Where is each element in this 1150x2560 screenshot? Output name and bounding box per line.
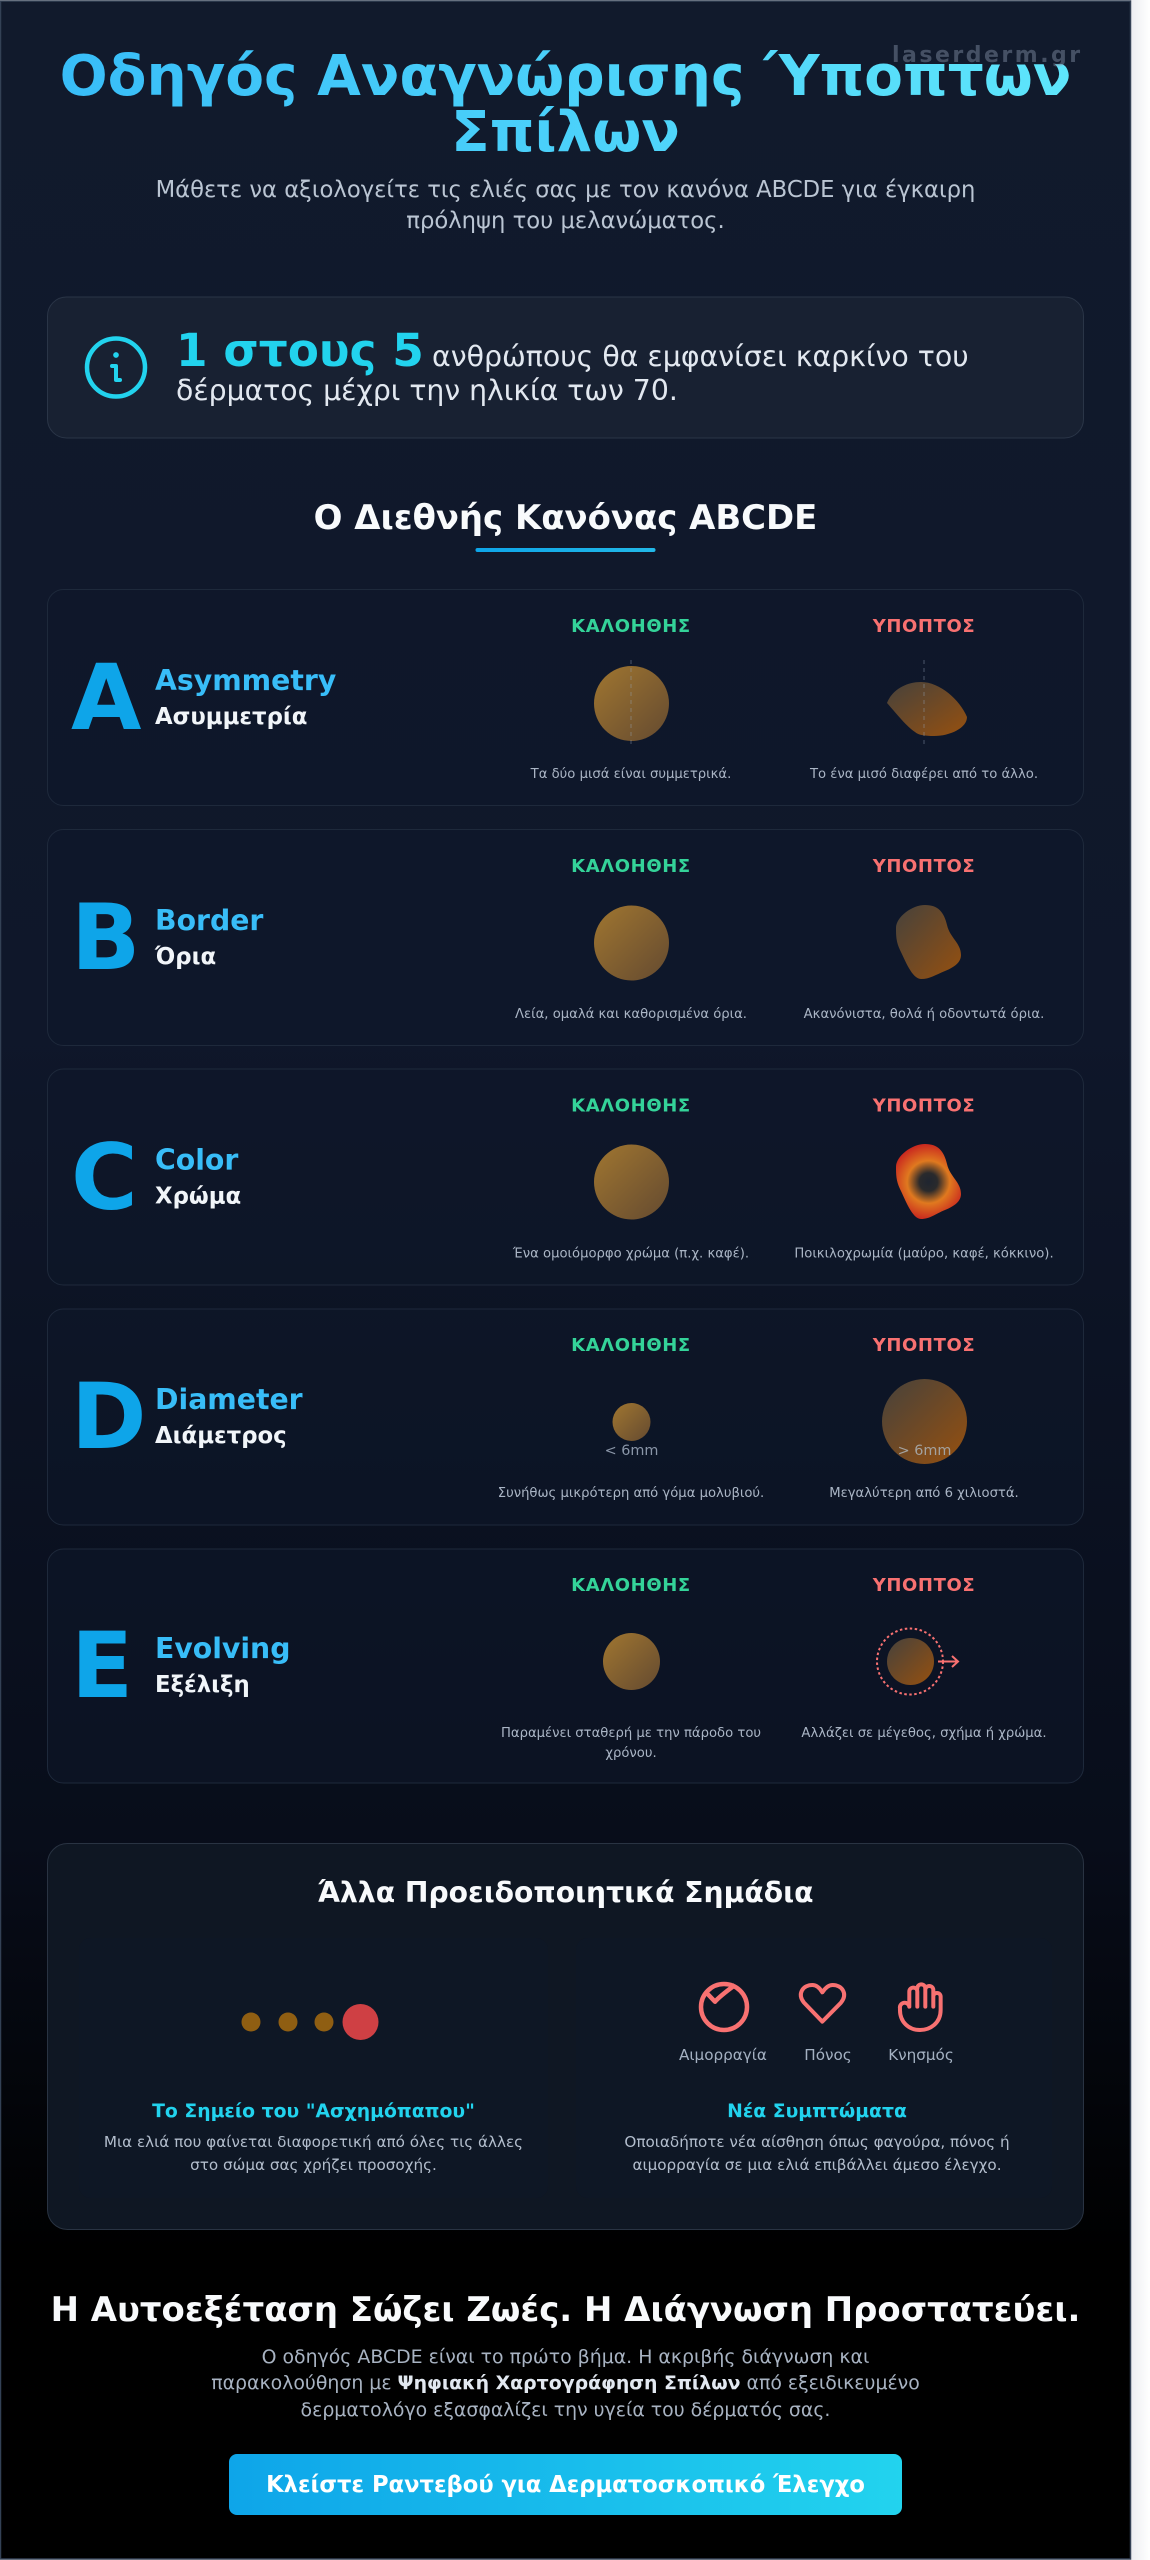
name B: Border bbox=[155, 904, 263, 937]
letter C: C bbox=[71, 1126, 138, 1230]
statistic text: δέρματος μέχρι την ηλικία των 70. bbox=[176, 374, 678, 407]
letter B: B bbox=[71, 886, 140, 991]
symptom labels bbox=[679, 2046, 954, 2064]
title: Οδηγός Αναγνώρισης Ύποπτων bbox=[60, 44, 1071, 109]
panel: other warning signs bbox=[48, 1844, 1084, 2230]
name C: Color bbox=[155, 1144, 238, 1176]
subpanel: new symptoms bbox=[576, 1938, 1052, 2198]
statistic text: ανθρώπους θα εμφανίσει καρκίνο του bbox=[432, 340, 969, 373]
letter E: E bbox=[71, 1614, 133, 1719]
name B bbox=[154, 904, 263, 970]
name B: Όρια bbox=[154, 944, 216, 970]
subpanel: ugly duckling: Μια ελιά που φαίνεται διαφορετική από όλες τις άλλες bbox=[104, 2133, 523, 2151]
page margin bbox=[1131, 0, 1150, 2560]
arrow bbox=[938, 1656, 958, 1667]
subtitle: πρόληψη του μελανώματος. bbox=[406, 208, 725, 234]
subpanel: ugly duckling: Το Σημείο του "Ασχημόπαπου" bbox=[152, 2101, 475, 2122]
benign C: ΚΑΛΟΗΘΗΣ bbox=[571, 1096, 691, 1116]
suspicious C bbox=[794, 1096, 1054, 1262]
icon: moles row bbox=[242, 2004, 378, 2040]
suspicious D bbox=[829, 1335, 1019, 1501]
panel: A asymmetry bbox=[48, 590, 1084, 806]
benign B: ΚΑΛΟΗΘΗΣ bbox=[571, 856, 691, 877]
statistic text bbox=[176, 324, 969, 407]
panel: B border bbox=[48, 830, 1084, 1046]
name E: Εξέλιξη bbox=[155, 1672, 250, 1698]
closing heading: Η Αυτοεξέταση Σώζει Ζωές. Η Διάγνωση Προστατεύει. bbox=[51, 2290, 1080, 2329]
closing text: παρακολούθηση με Ψηφιακή Χαρτογράφηση Σπίλων από εξειδικευμένο bbox=[211, 2372, 920, 2394]
panel: C color bbox=[48, 1069, 1084, 1285]
suspicious C: Ποικιλοχρωμία (μαύρο, καφέ, κόκκινο). bbox=[794, 1246, 1054, 1262]
name A: Asymmetry bbox=[155, 664, 336, 697]
statistic text: 1 στους 5 bbox=[176, 324, 424, 377]
call to action button bbox=[229, 2454, 902, 2515]
name A: Ασυμμετρία bbox=[155, 704, 307, 730]
benign D: ΚΑΛΟΗΘΗΣ bbox=[571, 1335, 691, 1356]
closing text: δερματολόγο εξασφαλίζει την υγεία του δέρματός σας. bbox=[301, 2399, 830, 2421]
benign D: Συνήθως μικρότερη από γόμα μολυβιού. bbox=[498, 1485, 764, 1501]
suspicious E bbox=[801, 1575, 1047, 1741]
suspicious B bbox=[804, 856, 1044, 1022]
benign C bbox=[512, 1096, 749, 1262]
subpanel: new symptoms: Οποιαδήποτε νέα αίσθηση όπως φαγούρα, πόνος ή bbox=[624, 2133, 1010, 2151]
name C bbox=[155, 1144, 241, 1210]
panel: D diameter bbox=[48, 1309, 1084, 1525]
subtitle: Μάθετε να αξιολογείτε τις ελιές σας με τον κανόνα ABCDE για έγκαιρη bbox=[156, 177, 975, 203]
suspicious A bbox=[809, 616, 1038, 782]
suspicious B: Ακανόνιστα, θολά ή οδοντωτά όρια. bbox=[804, 1006, 1044, 1022]
subpanel: new symptoms: Νέα Συμπτώματα bbox=[727, 2101, 907, 2122]
name C: Χρώμα bbox=[155, 1184, 241, 1210]
icon: bleeding bbox=[701, 1984, 747, 2030]
letter D: D bbox=[71, 1365, 147, 1470]
suspicious C: ΥΠΟΠΤΟΣ bbox=[872, 1096, 975, 1116]
suspicious D: ΥΠΟΠΤΟΣ bbox=[872, 1335, 975, 1356]
name D: Διάμετρος bbox=[155, 1423, 287, 1449]
panel heading: Άλλα Προειδοποιητικά Σημάδια bbox=[318, 1876, 813, 1909]
benign A: ΚΑΛΟΗΘΗΣ bbox=[571, 616, 691, 637]
benign E: χρόνου. bbox=[605, 1745, 657, 1761]
name E bbox=[155, 1632, 290, 1698]
subpanel: new symptoms: αιμορραγία σε μια ελιά επιβάλλει άμεσο έλεγχο. bbox=[632, 2156, 1002, 2174]
watermark: laserderm.gr bbox=[892, 43, 1083, 68]
closing text: Ο οδηγός ABCDE είναι το πρώτο βήμα. Η ακριβής διάγνωση και bbox=[262, 2346, 869, 2368]
panel: statistic bbox=[48, 297, 1084, 438]
name E: Evolving bbox=[155, 1632, 290, 1665]
suspicious E: Αλλάζει σε μέγεθος, σχήμα ή χρώμα. bbox=[801, 1725, 1047, 1741]
benign A: Τα δύο μισά είναι συμμετρικά. bbox=[530, 766, 731, 782]
letter A: A bbox=[71, 646, 141, 751]
subtitle bbox=[156, 177, 975, 234]
title: Σπίλων bbox=[451, 100, 680, 165]
subpanel: ugly duckling: στο σώμα σας χρήζει προσοχής. bbox=[190, 2156, 437, 2174]
name A bbox=[155, 664, 336, 730]
panel: E evolving bbox=[48, 1549, 1084, 1783]
benign D: < 6mm bbox=[605, 1443, 658, 1459]
benign D bbox=[498, 1335, 764, 1501]
suspicious B: ΥΠΟΠΤΟΣ bbox=[872, 856, 975, 877]
icon: itching bbox=[900, 1984, 941, 2030]
benign B: Λεία, ομαλά και καθορισμένα όρια. bbox=[515, 1006, 747, 1022]
icon: pain bbox=[801, 1985, 844, 2022]
suspicious D: Μεγαλύτερη από 6 χιλιοστά. bbox=[829, 1485, 1019, 1501]
suspicious A: Το ένα μισό διαφέρει από το άλλο. bbox=[809, 766, 1038, 782]
title bbox=[60, 44, 1071, 165]
benign E: ΚΑΛΟΗΘΗΣ bbox=[571, 1575, 691, 1596]
symptom labels: Πόνος bbox=[804, 2046, 852, 2064]
icon: info bbox=[87, 338, 145, 396]
benign E: Παραμένει σταθερή με την πάροδο του bbox=[501, 1725, 761, 1741]
suspicious E: ΥΠΟΠΤΟΣ bbox=[872, 1575, 975, 1596]
symptom labels: Κνησμός bbox=[888, 2046, 954, 2064]
benign C: Ένα ομοιόμορφο χρώμα (π.χ. καφέ). bbox=[512, 1246, 749, 1262]
section heading: Ο Διεθνής Κανόνας ABCDE bbox=[314, 498, 817, 537]
call to action button: Κλείστε Ραντεβού για Δερματοσκοπικό Έλεγχο bbox=[266, 2472, 865, 2498]
symptom labels: Αιμορραγία bbox=[679, 2046, 767, 2064]
suspicious D: > 6mm bbox=[898, 1443, 951, 1459]
benign E bbox=[501, 1575, 761, 1761]
suspicious A: ΥΠΟΠΤΟΣ bbox=[872, 616, 975, 637]
benign A bbox=[530, 616, 731, 782]
name D bbox=[155, 1383, 303, 1449]
name D: Diameter bbox=[155, 1383, 303, 1416]
benign B bbox=[515, 856, 747, 1022]
closing text bbox=[211, 2346, 920, 2421]
subpanel: ugly duckling bbox=[79, 1938, 548, 2198]
